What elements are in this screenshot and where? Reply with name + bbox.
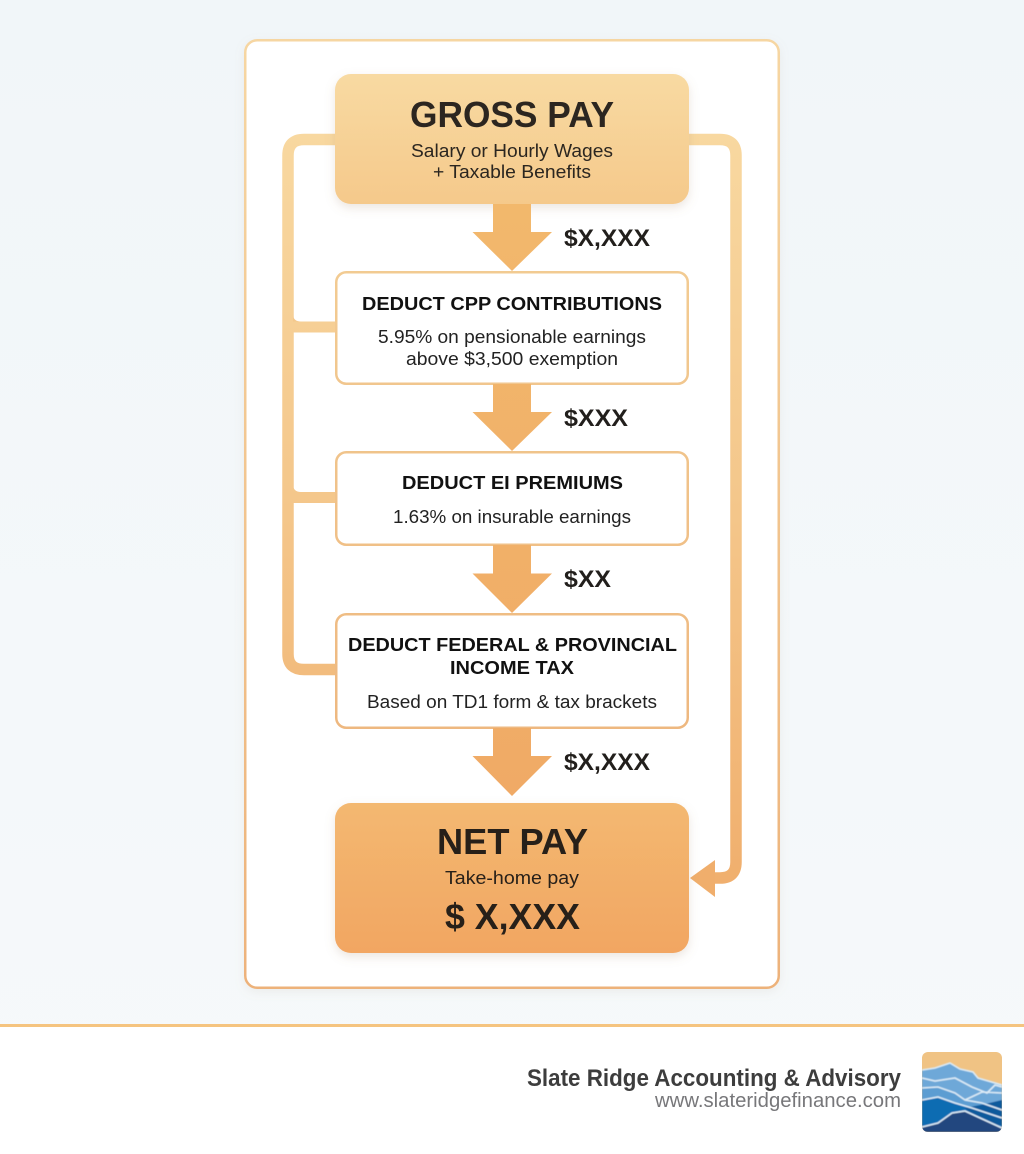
text: tax basis: Based on TD1 form & tax brackets: [367, 692, 657, 712]
text: gross pay description line 1: Salary or Hourly Wages: [411, 141, 613, 161]
heading: CPP: DEDUCT CPP CONTRIBUTIONS: [362, 293, 662, 314]
icon: mountain logo: [922, 1052, 1002, 1132]
panel: income tax: [336, 614, 688, 728]
panel: CPP contributions: [336, 272, 688, 384]
website: www.slateridgefinance.com: [654, 1090, 901, 1112]
panel: net pay: [335, 803, 689, 953]
heading: EI: DEDUCT EI PREMIUMS: [402, 472, 623, 493]
text: EI rate: 1.63% on insurable earnings: [393, 507, 631, 527]
panel: flowchart card: [245, 40, 779, 988]
arrow: tax to net: [472, 728, 552, 796]
footer band: [0, 1024, 1024, 1154]
arrow: EI to tax: [472, 545, 552, 613]
text: CPP rate: 5.95% on pensionable earnings: [378, 327, 646, 347]
arrow: left deductions bracket: [288, 140, 340, 670]
panel: gross pay: [335, 74, 689, 204]
text: CPP exemption: above $3,500 exemption: [406, 349, 618, 369]
heading: gross pay: GROSS PAY: [410, 94, 614, 135]
brand name: Slate Ridge Accounting & Advisory: [527, 1065, 902, 1092]
arrow: right bypass line into net pay: [685, 140, 736, 897]
amount: net pay: $ X,XXX: [445, 896, 580, 937]
text: gross pay description line 2: + Taxable Benefits: [433, 162, 591, 182]
panel: EI premiums: [336, 452, 688, 545]
amount: EI: $XX: [564, 566, 611, 593]
heading: net pay: NET PAY: [437, 821, 588, 862]
arrow: gross to CPP: [472, 204, 552, 271]
heading: tax line 2: INCOME TAX: [450, 657, 575, 678]
amount: CPP: $XXX: [564, 405, 628, 432]
heading: tax line 1: DEDUCT FEDERAL & PROVINCIAL: [348, 634, 677, 655]
amount: after gross: $X,XXX: [564, 225, 650, 252]
arrow: CPP to EI: [472, 384, 552, 451]
amount: tax: $X,XXX: [564, 749, 650, 776]
text: take-home pay: Take-home pay: [445, 868, 579, 888]
